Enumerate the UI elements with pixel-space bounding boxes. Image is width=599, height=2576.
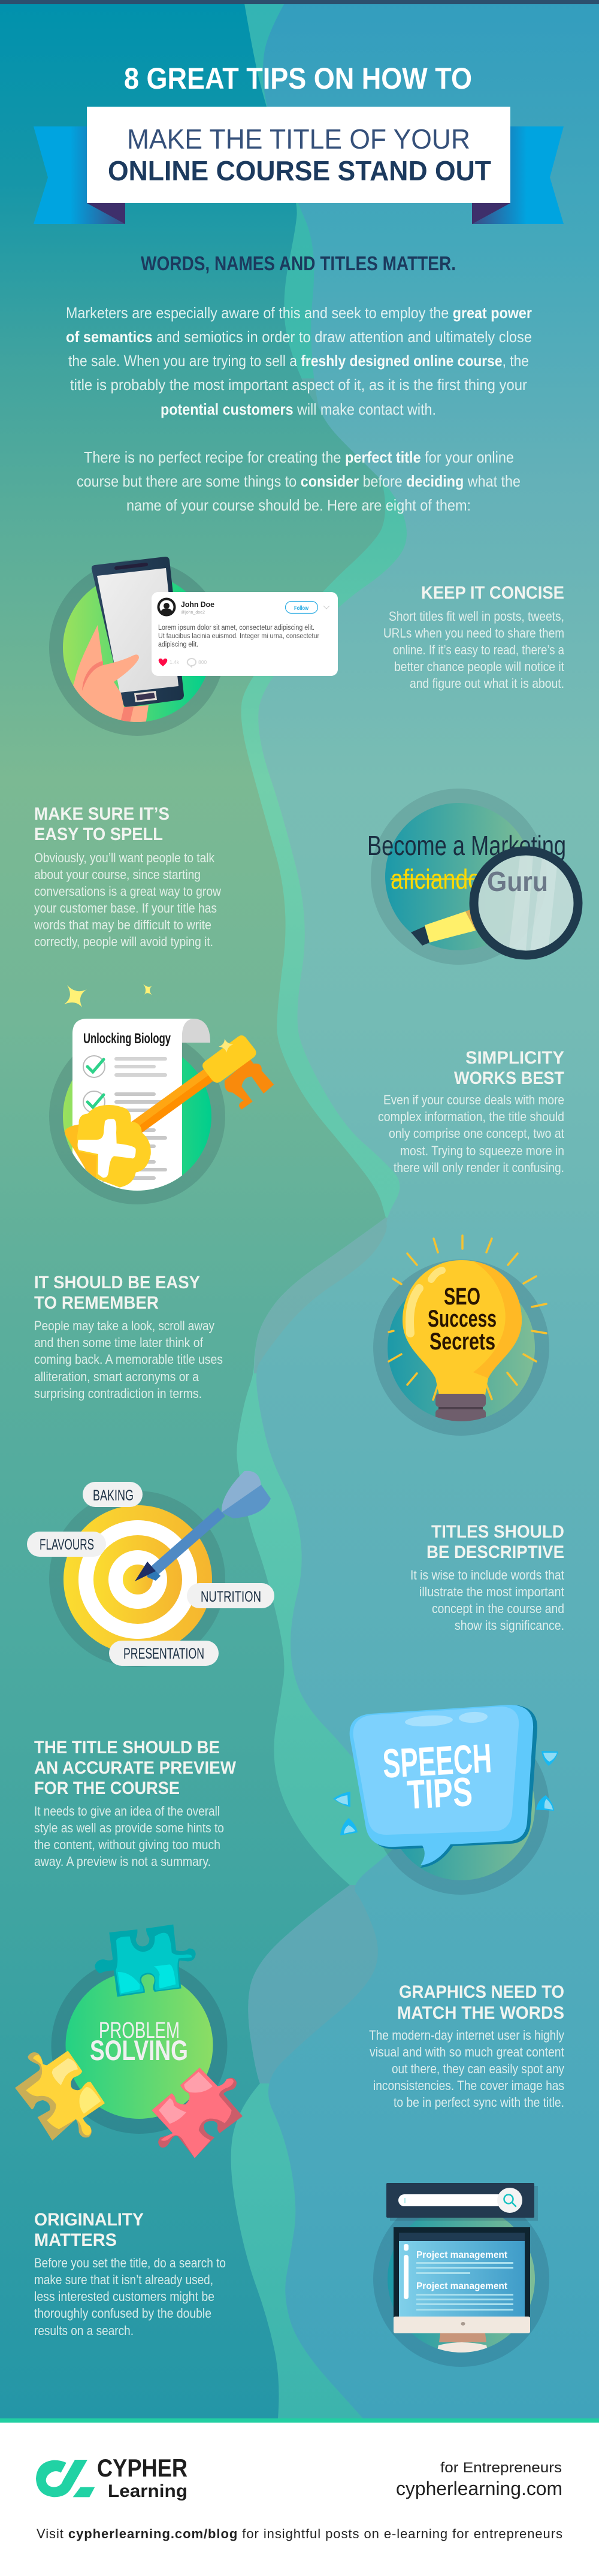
heading: MATCH THE WORDS [397,2003,564,2023]
heading [397,1982,564,2023]
sparkle small [143,984,152,995]
tip 5 [410,1522,564,1633]
body: Obviously, you’ll want people to talk [34,850,215,865]
label: presentation [109,1641,219,1666]
body: and then some time later think of [34,1335,204,1350]
tweet name: John Doe [181,600,214,609]
label: presentation: PRESENTATION [123,1645,204,1662]
magnifier glass [474,851,578,955]
body: inconsistencies. The cover image has [373,2078,564,2093]
body [34,1318,223,1401]
body: Even if your course deals with more [383,1092,564,1107]
heading: TO REMEMBER [34,1293,159,1313]
body: style as well as provide some hints to [34,1820,224,1835]
heading [34,1738,237,1798]
heading [34,2210,144,2250]
body [383,609,565,691]
puzzle pink [152,2068,243,2158]
ribbon left [34,126,125,224]
body: most. Trying to squeeze more in [400,1143,564,1158]
logo subname: Learning [108,2481,187,2501]
heading: AN ACCURATE PREVIEW [34,1758,237,1778]
intro paragraph 1: Marketers are especially aware of this and seek to employ the great power [66,304,532,322]
ribbon fold right [472,203,510,224]
body: coming back. A memorable title uses [34,1352,223,1367]
intro paragraph 2 [77,448,521,514]
body: to be in perfect sync with the title. [394,2095,564,2110]
heading: ORIGINALITY [34,2210,144,2230]
title line 1: 8 GREAT TIPS ON HOW TO [124,62,472,95]
tip 2 [34,804,221,949]
target [63,1505,212,1654]
body: and figure out what it is about. [410,676,564,691]
heading: THE TITLE SHOULD BE [34,1738,220,1757]
tweet body: Ut faucibus lacinia euismod. Integer mi urna, consectetur [158,633,319,640]
bubble highlights [405,1714,453,1728]
monitor stand [437,2333,487,2352]
teal wave [231,0,599,2418]
document [72,1019,210,1204]
bulb glass [403,1260,522,1395]
tip 8 [34,2210,226,2338]
sparkle large [64,985,87,1007]
intro paragraph 2: There is no perfect recipe for creating the perfect title for your online [84,448,514,466]
illustration: scroll and key [49,984,274,1204]
icon: comment [187,659,196,667]
icon: key [132,1035,274,1134]
intro subheading: WORDS, NAMES AND TITLES MATTER. [141,252,456,274]
search bar [386,2183,538,2221]
body: show its significance. [455,1618,564,1633]
bulb base [435,1394,486,1424]
illustration: puzzle [15,1925,243,2158]
problem text: PROBLEM [99,2018,180,2043]
title line 3: ONLINE COURSE STAND OUT [108,155,491,186]
label: flavours: FLAVOURS [40,1536,94,1553]
body: away. A preview is not a summary. [34,1854,211,1869]
body: make sure that it isn’t already used, [34,2272,213,2287]
follow button: Follow [294,605,308,612]
key sparkle [219,1038,233,1053]
tip 6 [34,1738,237,1869]
body [410,1568,564,1633]
body: thoroughly confused by the double [34,2306,211,2321]
body: illustrate the most important [419,1584,564,1599]
heading [454,1048,564,1088]
heading: WORKS BEST [454,1068,564,1088]
tweet body: Lorem ipsum dolor sit amet, consectetur adipiscing elit. [158,624,314,632]
label: flavours [27,1532,106,1557]
intro paragraph 1: the sale. When you are trying to sell a freshly designed online course, the [68,352,529,370]
magnifier handle [411,909,477,946]
tip 1 [383,583,565,691]
heading: GRAPHICS NEED TO [399,1982,564,2002]
body: People may take a look, scroll away [34,1318,214,1333]
icon: phone [92,557,184,707]
body: online. If it’s easy to read, there’s a [393,642,565,657]
illustration: target and dart [27,1471,274,1667]
title line 2: MAKE THE TITLE OF YOUR [127,123,470,155]
body: better chance people will notice it [394,659,564,674]
body: less interested customers might be [34,2289,214,2304]
bulb text [428,1284,497,1355]
intro paragraph 1 [66,304,532,418]
bulb text: Secrets [429,1328,495,1355]
tweet card [152,592,338,676]
body: the content, without giving too much [34,1837,220,1852]
heading: SIMPLICITY [465,1048,564,1068]
body [34,1804,224,1869]
intro paragraph 1: of semantics and semiotics in order to draw attention and ultimately close [66,328,532,346]
illustration: light bulb [373,1236,549,1436]
heading: MAKE SURE IT’S [34,804,170,824]
checklist [83,1056,165,1186]
logo mark [36,2460,95,2497]
dart [135,1471,271,1581]
heading: TITLES SHOULD [431,1522,564,1542]
body: only comprise one concept, two at [389,1126,564,1141]
heading [34,804,170,844]
ribbon right [472,126,564,224]
body: Short titles fit well in posts, tweets, [389,609,564,624]
monitor text: Project management [416,2281,508,2291]
grey wave overlaps [248,378,419,2083]
body: out there, they can easily spot any [392,2061,564,2076]
follow button [285,602,317,614]
body: concept in the course and [432,1601,564,1616]
body: words that may be difficult to write [34,917,211,932]
tip 7 [369,1982,564,2110]
heading: EASY TO SPELL [34,825,163,844]
key shaft [132,1068,214,1134]
avatar [157,598,176,616]
illustration: magnifier [367,789,578,965]
logo name: CYPHER [97,2454,187,2482]
bubble edge [353,1705,537,1868]
body: your customer base. If your title has [34,901,217,916]
body: complex information, the title should [378,1109,564,1124]
body [34,2255,226,2338]
for entrepreneurs: for Entrepreneurs [440,2460,562,2476]
document title: Unlocking Biology [83,1031,171,1047]
visit line: Visit cypherlearning.com/blog for insightful posts on e-learning for entrepreneurs [37,2526,562,2541]
website: cypherlearning.com [396,2478,562,2499]
body: URLs when you need to share them [383,626,564,641]
icon: key head [64,1105,151,1188]
body: surprising contradiction in terms. [34,1386,202,1401]
body: visual and with so much great content [370,2045,564,2059]
body: It needs to give an idea of the overall [34,1804,220,1819]
monitor text: Project management [416,2250,508,2260]
tip 4 [34,1273,223,1401]
title box [87,107,510,203]
intro paragraph 1: potential customers will make contact with. [161,400,436,418]
tweet body: adipiscing elit. [158,641,198,648]
tweet body [158,624,319,648]
heading: KEEP IT CONCISE [421,583,564,603]
body: The modern-day internet user is highly [369,2028,564,2043]
bubble text [382,1735,495,1819]
heading [34,1273,200,1313]
tweet card: 1.4k [170,659,180,665]
right wave [256,0,599,2418]
monitor [394,2227,530,2333]
heading: MATTERS [34,2230,117,2250]
intro paragraph 2: name of your course should be. Here are eight of them: [126,496,471,514]
struck word: aficiando [391,863,480,895]
intro paragraph 2: course but there are some things to consider before deciding what the [77,472,521,490]
body: correctly, people will avoid typing it. [34,934,213,949]
body: Before you set the title, do a search to [34,2255,226,2270]
pill labels [27,1482,274,1666]
footer [0,2418,599,2576]
label: baking: BAKING [93,1487,134,1504]
bubble inner [353,1707,519,1835]
bulb rays [389,1236,546,1400]
body [369,2028,564,2110]
puzzle teal [95,1925,196,1997]
bulb text: Success [428,1306,497,1332]
body [34,850,221,949]
body [378,1092,564,1175]
key collar [202,1035,256,1083]
magnifier glass: Guru [487,866,548,897]
bubble [350,1705,533,1865]
body: results on a search. [34,2323,134,2338]
tweet handle: @john_doe2 [181,611,205,615]
body: conversations is a great way to grow [34,884,221,899]
heading [426,1522,564,1562]
puzzle yellow [15,2050,105,2140]
ribbon fold left [87,203,125,224]
label: nutrition: NUTRITION [201,1589,261,1605]
tip 3 [378,1048,564,1175]
droplets [333,1751,558,1835]
title banner [34,62,564,224]
body: about your course, since starting [34,867,201,882]
illustration: monitor and search bar [373,2183,549,2367]
label: nutrition [187,1583,274,1608]
heading: BE DESCRIPTIVE [426,1542,564,1562]
heading: FOR THE COURSE [34,1778,180,1798]
solving text: SOLVING [90,2034,188,2066]
bubble text: SPEECH [382,1735,493,1787]
illustration: speech bubble [333,1705,558,1895]
bubble text: TIPS [406,1769,474,1818]
body: alliteration, smart acronyms or a [34,1369,199,1384]
label: baking [83,1482,143,1507]
body: there will only render it confusing. [394,1160,564,1175]
key teeth [225,1059,274,1110]
bulb text: SEO [444,1284,480,1310]
icon: hand [73,625,149,722]
illustration: phone and tweet [49,557,338,736]
icon: heart [159,659,167,666]
body: It is wise to include words that [410,1568,564,1583]
intro paragraph 1: title is probably the most important aspect of it, as it is the first thing your [70,376,527,394]
tweet card: 800 [198,659,207,665]
heading: IT SHOULD BE EASY [34,1273,200,1292]
